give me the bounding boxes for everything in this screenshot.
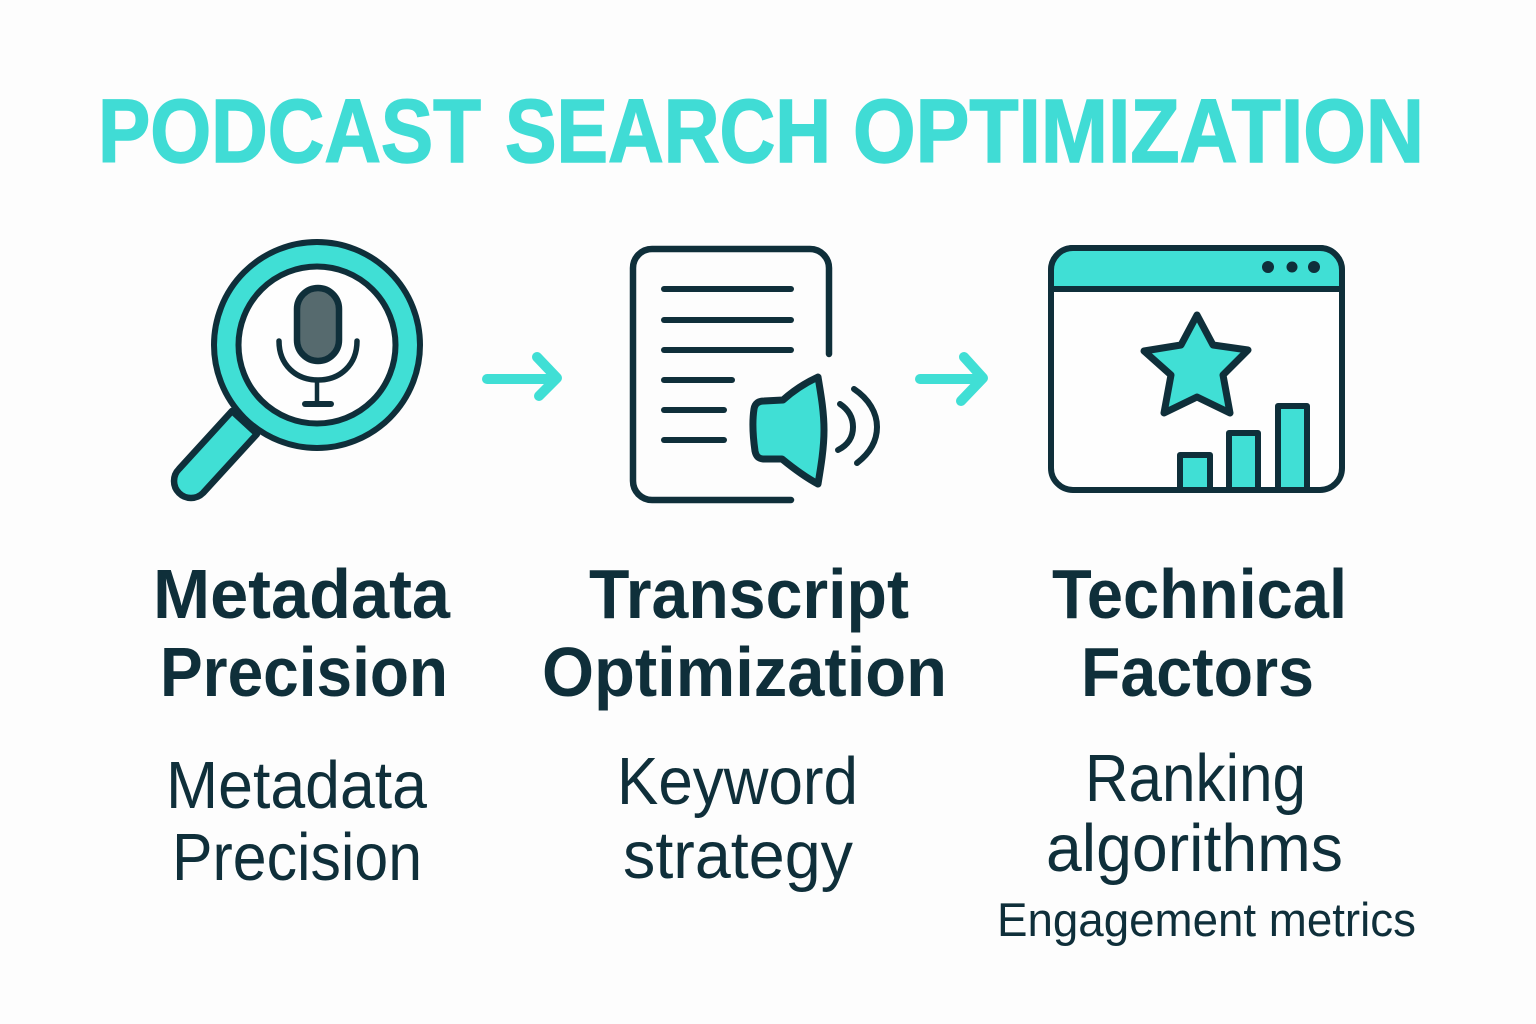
heading: transcript optimization — [542, 555, 947, 711]
microphone — [279, 288, 357, 404]
transcript lines — [664, 289, 791, 440]
text: keyword strategy: Keyword — [617, 744, 858, 819]
window dots — [1262, 261, 1320, 273]
heading: technical factors: Factors — [1081, 633, 1314, 711]
text: ranking algorithms, engagement metrics: Ranking — [1085, 741, 1306, 816]
browser header bar — [1051, 248, 1342, 289]
heading: technical factors — [1052, 555, 1347, 711]
text: metadata precision: Precision — [172, 820, 422, 895]
heading: transcript optimization: Transcript — [589, 555, 909, 633]
text: metadata precision: Metadata — [166, 748, 428, 823]
heading: transcript optimization: Optimization — [542, 633, 947, 711]
document outline — [633, 249, 829, 500]
magnifier lens ring — [214, 242, 420, 448]
heading: technical factors: Technical — [1052, 555, 1347, 633]
text: keyword strategy: strategy — [623, 818, 853, 893]
browser window — [1051, 248, 1342, 490]
speaker — [753, 377, 824, 484]
text: ranking algorithms, engagement metrics: algorithms — [1046, 811, 1343, 886]
bar chart — [1180, 406, 1307, 490]
magnifier handle — [174, 411, 257, 498]
title — [98, 82, 1424, 182]
arrow: transcript to technical — [920, 357, 983, 401]
text: ranking algorithms, engagement metrics: Engagement metrics — [997, 893, 1416, 946]
heading: metadata precision: Metadata — [153, 555, 451, 633]
icon: transcript document with speaker — [633, 249, 877, 500]
star — [1144, 315, 1248, 413]
arrow: metadata to transcript — [487, 357, 557, 396]
text: keyword strategy — [617, 744, 858, 893]
sound waves — [838, 404, 853, 450]
icon: browser window with star and bars — [1051, 248, 1342, 490]
heading: metadata precision: Precision — [160, 633, 448, 711]
text: ranking algorithms, engagement metrics — [997, 741, 1416, 946]
title: SEARCH — [505, 82, 831, 182]
heading: metadata precision — [153, 555, 451, 711]
icon: magnifier with microphone — [174, 242, 420, 498]
text: metadata precision — [166, 748, 428, 895]
title: OPTIMIZATION — [853, 82, 1424, 182]
title: PODCAST — [98, 82, 481, 182]
